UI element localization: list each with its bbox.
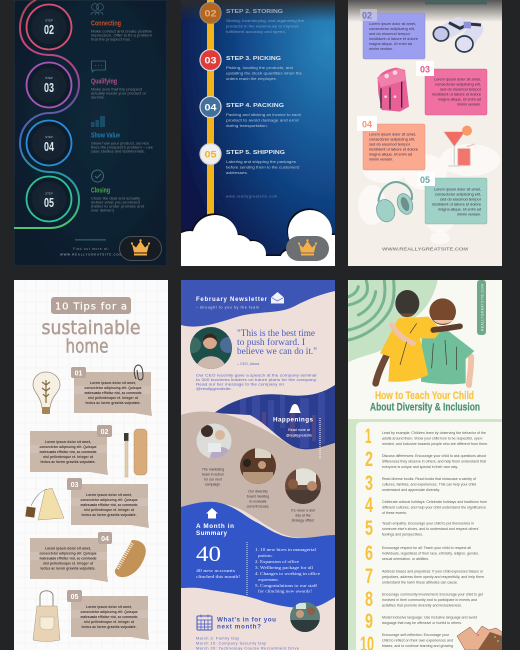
icon: envelope (271, 292, 284, 304)
caption 3 (291, 508, 315, 522)
card 03: sed do eiusmod tempor (440, 88, 482, 92)
caption 2: board meeting (247, 494, 269, 498)
tip 01: lectus ac lorem gravida vulputate. (86, 401, 141, 405)
text: storing: Storing, inventorying, and organizing the (226, 19, 304, 23)
text: closing (91, 186, 144, 212)
card 05: Lorem ipsum dolor sit amet, (434, 188, 481, 192)
icon: toothbrush and tube (124, 429, 147, 477)
march dates (196, 636, 299, 650)
tip 1 (365, 425, 488, 448)
march dates: March 3: Family Day (196, 636, 239, 640)
tip 4: Celebrate cultural holidays: Celebrate holidays and traditions from (382, 500, 487, 504)
icon: house (206, 508, 218, 518)
text: storing: products in the warehouse to improve (226, 24, 299, 28)
tip 4: different cultures, and help your child understand the significance (382, 506, 486, 510)
text: summary heading: Summary (196, 530, 227, 537)
stat: 40: 40 new accounts (196, 569, 236, 573)
tip 2: everyone is unique and special in their own way. (382, 465, 458, 469)
tip 7: Address biases and prejudices: If your child expresses biases or (382, 570, 484, 574)
tip 8: 8 (365, 588, 373, 611)
icon: binoculars (433, 22, 481, 52)
caption 1: team in action (202, 472, 224, 476)
text: picking: orders reach the employee. (226, 77, 277, 81)
card 04 (357, 116, 425, 170)
title: sustainable (42, 317, 140, 339)
tip 03 (67, 478, 149, 528)
card 03 (416, 61, 487, 115)
step 03: 03 (44, 80, 54, 95)
card 02: sed do eiusmod tempor (369, 32, 411, 36)
stat: 40 (196, 541, 240, 579)
intro text: to 300 business leaders on future plans for the company. (196, 378, 317, 382)
step 02 badge (200, 2, 221, 24)
tip 10: Encourage self-reflection: Encourage your (382, 633, 450, 637)
title (42, 297, 140, 358)
tip 05: malesuada efficitur nisi, ac commodo (80, 615, 138, 619)
text: newsletter heading: – Brought to you by the team (196, 306, 259, 310)
card 03: magna aliqua. Ut enim ad (438, 98, 481, 102)
text: storing (226, 9, 304, 34)
tip 05: lectus ac lorem gravida vulputate. (82, 625, 137, 629)
title: 10 Tips for a (55, 302, 127, 312)
tip 3: Read diverse books: Read books that showcase a variety of (382, 477, 476, 481)
tip 05: 05 (71, 594, 78, 601)
caption 3: strategy office! (292, 518, 314, 522)
tip 02: 02 (101, 429, 108, 436)
card 02 (360, 9, 425, 59)
tip 5: feelings and perspectives. (382, 532, 423, 536)
tip 7: prejudices, address them openly and respectfully, and help them (382, 575, 484, 579)
text: shipping (226, 150, 300, 175)
text: connecting: Make contact and create positive (91, 30, 152, 34)
quote: believe we can do it." (237, 346, 317, 356)
step 04 badge (200, 96, 221, 118)
text: qualifying: service. (91, 96, 105, 100)
text: shipping: STEP 5. SHIPPING (226, 150, 285, 156)
step 02 badge: 02 (204, 8, 216, 20)
summary list: 3. Wellbeing package for all (255, 566, 313, 570)
icon: chat (92, 61, 106, 72)
tip 9: Model inclusive language: Use inclusive language and avoid (382, 616, 477, 620)
side url tag: REALLYGREATSITE.COM (480, 284, 484, 331)
tip 5: 5 (365, 517, 373, 540)
step 03 badge: 03 (204, 56, 216, 66)
tip 04: nisl pellentesque et. Integer ut (43, 562, 94, 566)
text: connecting: impression. Offer to fix a problem (91, 34, 152, 38)
stat: 40: 40 (196, 541, 221, 566)
tip 10 (360, 633, 453, 650)
icon: comb (115, 540, 146, 577)
what's next heading: next month? (217, 624, 261, 630)
text: picking: updating the stock quantities when the (226, 72, 302, 76)
tip 04: lectus ac lorem gravida vulputate. (40, 566, 96, 570)
intro text (196, 374, 318, 391)
summary list: 2. Expansion of office (255, 560, 299, 564)
tip 05: consectetur adipiscing elit. Quisque (80, 610, 138, 614)
happenings banner (210, 380, 340, 455)
happenings banner: Happenings (273, 416, 313, 424)
text: show value (91, 132, 153, 152)
summary list (255, 548, 320, 594)
winding ribbon (14, 0, 79, 228)
tip 01: Lorem ipsum dolor sit amet, (90, 381, 136, 385)
text: closing: Close the deal and actually (91, 196, 140, 200)
card 04: minim veniam. (369, 158, 393, 162)
team photo 1 (196, 423, 232, 459)
tip 10: biases, and to continue learning and growing (382, 644, 453, 648)
stat: 40: clinched this month! (196, 575, 240, 579)
green blob and arcs (348, 280, 438, 362)
caption 1 (202, 468, 224, 486)
panel: sustainable home tips (14, 280, 168, 650)
footer link: Find out more at: (73, 247, 109, 251)
card 05: sed do eiusmod tempor (440, 198, 482, 202)
timeline bar (207, 0, 214, 218)
panel: warehouse steps (181, 0, 335, 266)
summary list: 5. Congratulations to our staff (255, 584, 318, 588)
tip 1: Lead by example: Children learn by observing the behavior of the (382, 431, 486, 435)
crown badge (120, 236, 162, 260)
step 05: STEP (45, 192, 53, 196)
intro text: Read our her message to the company on (196, 382, 284, 386)
icon: light bulb (33, 372, 60, 414)
card 03: minim veniam. (457, 102, 481, 106)
tip 04: Lorem ipsum dolor sit amet, (45, 546, 91, 550)
tip 10: child to reflect on their own experiences and (382, 638, 453, 642)
tip 05: nisl pellentesque et. Integer ut (84, 620, 135, 624)
tip 7: understand the harm these attitudes can cause. (382, 580, 458, 584)
tip 03: Lorem ipsum dolor sit amet, (86, 493, 132, 497)
illustration: hands (457, 626, 502, 650)
tip 3: understand and appreciate diversity. (382, 488, 440, 492)
icon: headphones (376, 181, 414, 222)
quote: – CEO, Adora (237, 362, 259, 366)
icon: backpack (377, 68, 409, 112)
tip 6 (365, 542, 479, 565)
taupe section (181, 411, 335, 538)
text: connecting: that the prospect has. (91, 38, 131, 42)
tip 2: differences they observe in others, and help them understand that (382, 460, 486, 464)
text: picking (226, 56, 302, 81)
icon: check (92, 170, 104, 182)
card 03: 03 (420, 64, 430, 74)
step 04: 04 (44, 139, 55, 154)
side url tag (477, 280, 486, 335)
panel: diversity and inclusion (348, 280, 502, 650)
card 02: minim veniam. (369, 47, 393, 51)
icon: cocktail (444, 126, 475, 166)
tip 04: malesuada efficitur nisi, ac commodo (40, 556, 97, 560)
tip 9 (365, 610, 477, 633)
tip 9: language that may be offensive or hurtful to others. (382, 621, 462, 625)
tip 1: adults around them. Show your child how to be respectful, open- (382, 436, 483, 440)
footer link: WWW.REALLYGREATSITE.COM (60, 252, 122, 256)
icon: people (91, 4, 103, 15)
card 03: consectetur adipiscing elit, (435, 82, 481, 86)
caption 1: for our next (204, 478, 222, 482)
what's next heading (217, 616, 276, 630)
card 04: magna aliqua. Ut enim ad (369, 152, 412, 156)
card 05: incididunt ut labore et dolore (432, 202, 481, 206)
step 03: STEP (45, 76, 53, 80)
tip 4: 4 (365, 494, 373, 517)
tip 02 (30, 425, 112, 475)
panel: february newsletter (181, 280, 340, 650)
tip 05 (67, 590, 149, 640)
text: storing: STEP 2. STORING (226, 9, 283, 15)
text: packing: STEP 4. PACKING (226, 103, 284, 109)
intro text: Our CEO recently gave a speech at the company seminar (196, 374, 318, 378)
panel: travel gear (348, 0, 502, 266)
tip 04: 04 (101, 536, 109, 543)
card 02: magna aliqua. Ut enim ad (369, 42, 412, 46)
happenings banner: Read more at (288, 428, 310, 432)
text: qualifying: Make sure that the prospect (91, 88, 142, 92)
tip 8 (365, 588, 483, 611)
text: show value: case studies and testimonials. (91, 150, 145, 154)
card 03: incididunt ut labore et dolore (432, 92, 481, 96)
tip 5 (365, 517, 479, 540)
caption 2: Our diversity (248, 490, 268, 494)
tip 6: Encourage respect for all: Teach your child to respect all (382, 546, 471, 550)
tip 01: consectetur adipiscing elit. Quisque (84, 386, 142, 390)
caption 1: campaign. (205, 482, 221, 486)
text: packing: product to avoid damage and error (226, 118, 300, 122)
ceo photo (185, 327, 236, 369)
icon: calendar (197, 614, 212, 630)
happenings banner: @reallygreatsite (286, 434, 312, 438)
step 03 badge (200, 50, 221, 70)
tip 7 (365, 565, 484, 588)
step 05 (26, 176, 72, 222)
summary list: requirements. (258, 578, 279, 582)
text: closing: deliver what you promised (91, 200, 140, 204)
text: closing: over deliver!) (91, 208, 114, 212)
step 04 (26, 120, 72, 166)
quote: "This is the best time (237, 328, 315, 338)
step 02 (26, 4, 72, 50)
text: summary heading: A Month in (196, 523, 234, 530)
text: shipping: Labeling and shipping the packages (226, 160, 296, 164)
text: connecting: Connecting (91, 18, 121, 28)
tip 6: individuals, regardless of their race, ethnicity, religion, gender, (382, 552, 479, 556)
text: picking: STEP 3. PICKING (226, 56, 281, 62)
text: show value: Show Value (91, 130, 120, 140)
icon: paperclip (134, 365, 143, 380)
tip 8: activities that promote diversity and inclusiveness. (382, 604, 462, 608)
tip 02: malesuada efficitur nisi, ac commodo (40, 450, 97, 454)
caption 1: The marketing (202, 468, 224, 472)
tip 4 (365, 494, 487, 517)
step 04 badge: 04 (204, 102, 217, 114)
tip 01: 01 (75, 370, 82, 378)
caption 3: It's never a dull (291, 508, 315, 512)
card 04: 04 (362, 120, 372, 130)
tip 01 (71, 367, 152, 416)
tip 03: consectetur adipiscing elit. Quisque (80, 498, 138, 502)
team photo 3 (285, 468, 321, 504)
step 04: STEP (45, 135, 53, 139)
text: connecting (91, 18, 152, 42)
crown badge (286, 236, 329, 261)
card 05: consectetur adipiscing elit, (435, 192, 481, 196)
tip 4: of these events. (382, 511, 407, 515)
card 04: Lorem ipsum dolor sit amet, (369, 132, 416, 136)
summary list: 4. Changes to working in office (255, 572, 320, 576)
tip 01: nisl pellentesque et. Integer ut (88, 396, 139, 400)
tip 03: 03 (71, 482, 78, 489)
step 05: 05 (44, 195, 54, 210)
march dates: March 15: Company Security Day (196, 640, 266, 646)
tip 03: nisl pellentesque et. Integer ut (84, 508, 135, 512)
tip 02: Lorem ipsum dolor sit amet, (45, 440, 91, 444)
tip 8: Encourage community involvement: Encourage your child to get (382, 592, 483, 596)
tip 3: 3 (365, 472, 373, 495)
step 03 (26, 62, 72, 108)
text: show value: fixes the prospect's problem – use (91, 146, 153, 150)
tip 05: Lorem ipsum dolor sit amet, (86, 605, 132, 609)
summary list: 1. 10 new hires in managerial (255, 548, 316, 552)
tip 9: 9 (365, 610, 373, 633)
text: shipping: before sending them to the customers' (226, 166, 300, 170)
tip 8: involved in their community and to participate in events and (382, 598, 477, 602)
icon: tote bag (33, 591, 60, 642)
tip 2: 2 (365, 448, 373, 471)
text: qualifying: actually needs your product or (91, 92, 147, 96)
text: summary heading (196, 523, 234, 537)
tip 2: Discuss differences: Encourage your child to ask questions about (382, 454, 486, 458)
tip 5: someone else's shoes, and to understand and respect others' (382, 527, 479, 531)
text: shipping: addresses. (226, 171, 248, 175)
tip 5: Teach empathy: Encourage your child to put themselves in (382, 522, 474, 526)
footer link (60, 240, 122, 256)
step 05 badge: 05 (204, 150, 217, 160)
card 03: Lorem ipsum dolor sit amet, (434, 78, 481, 82)
text: qualifying: Qualifying (91, 76, 117, 86)
team photo 2 (240, 448, 276, 484)
card 04: consectetur adipiscing elit, (369, 138, 415, 142)
card 02: incididunt ut labore et dolore (369, 37, 418, 41)
step 02: STEP (45, 18, 53, 22)
tip 7: 7 (365, 565, 373, 588)
caption 3: day at the (295, 514, 311, 518)
text: picking: Picking, locating the products, and (226, 66, 293, 70)
tip 3: cultures, families, and experiences. This can help your child (382, 482, 476, 486)
quote: to push forward. I (237, 337, 305, 347)
caption 2: to evaluate (249, 500, 267, 504)
tip 1: 1 (365, 425, 372, 448)
card 02: consectetur adipiscing elit, (369, 27, 415, 31)
text: newsletter heading: February Newsletter (196, 297, 268, 303)
card 02: Lorem ipsum dolor sit amet, (369, 22, 416, 26)
website link: www.reallygreatsite.com (226, 194, 277, 198)
step 02: 02 (44, 22, 54, 37)
card 05: 05 (420, 175, 430, 185)
text: newsletter heading (196, 297, 268, 310)
text: packing: Packing and sticking an invoice to each (226, 113, 301, 117)
card 05: minim veniam. (457, 212, 481, 216)
card 02: 02 (362, 10, 372, 20)
tip 01: malesuada efficitur nisi, ac commodo (84, 391, 142, 395)
text: packing (226, 103, 301, 128)
tip 03: lectus ac lorem gravida vulputate. (82, 513, 137, 517)
icon: bell (289, 404, 301, 413)
title: home (66, 336, 108, 358)
world map (358, 144, 500, 244)
card 05: magna aliqua. Ut enim ad (438, 208, 481, 212)
quote (237, 328, 317, 366)
text: storing: fulfillment accuracy and speed. (226, 30, 286, 34)
caption 2 (247, 490, 269, 508)
list frame (348, 419, 502, 650)
tip 04 (30, 532, 112, 582)
month in summary section (181, 502, 335, 608)
tip 6: 6 (365, 542, 373, 565)
step 05 badge (200, 144, 221, 164)
summary list: for clinching new awards! (258, 590, 312, 594)
tip 1: minded, and inclusive towards people who are different from them. (382, 442, 488, 446)
title: How to Teach Your Child (375, 390, 474, 402)
header wave (181, 280, 335, 327)
text: qualifying (91, 78, 146, 98)
tip 3 (365, 472, 476, 495)
team photo 4 (290, 602, 320, 632)
tip 2 (365, 448, 486, 471)
text: closing: (better to under promise and (91, 204, 144, 208)
text: closing: Closing (91, 186, 110, 194)
card 05 (417, 172, 487, 224)
tip 6: sexual orientation, or abilities. (382, 557, 429, 561)
card 04: incididunt ut labore et dolore (369, 148, 418, 152)
icon: mesh bag (25, 488, 64, 520)
what's next heading: What's in for you (217, 616, 276, 624)
website link: WWW.REALLYGREATSITE.COM (382, 246, 469, 252)
title: About Diversity & Inclusion (370, 402, 480, 414)
text: packing: during transportation. (226, 124, 268, 128)
tip 02: nisl pellentesque et. Integer ut (43, 455, 94, 459)
title (370, 390, 480, 414)
icon: bars (91, 116, 105, 127)
tip 02: lectus ac lorem gravida vulputate. (40, 460, 96, 464)
card 04: sed do eiusmod tempor (369, 142, 411, 146)
tip 03: malesuada efficitur nisi, ac commodo (80, 503, 138, 507)
tip 02: consectetur adipiscing elit. Quisque (40, 445, 97, 449)
clouds (181, 208, 335, 266)
illustration: two children (376, 290, 474, 385)
text: show value: Show how your product, service (91, 142, 149, 146)
caption 2: current issues. (247, 504, 269, 508)
panel: sales steps (14, 0, 167, 266)
intro text: @reallygreatsite. (196, 387, 232, 391)
tip 04: consectetur adipiscing elit. Quisque (40, 552, 97, 556)
summary list: positions. (258, 554, 273, 558)
